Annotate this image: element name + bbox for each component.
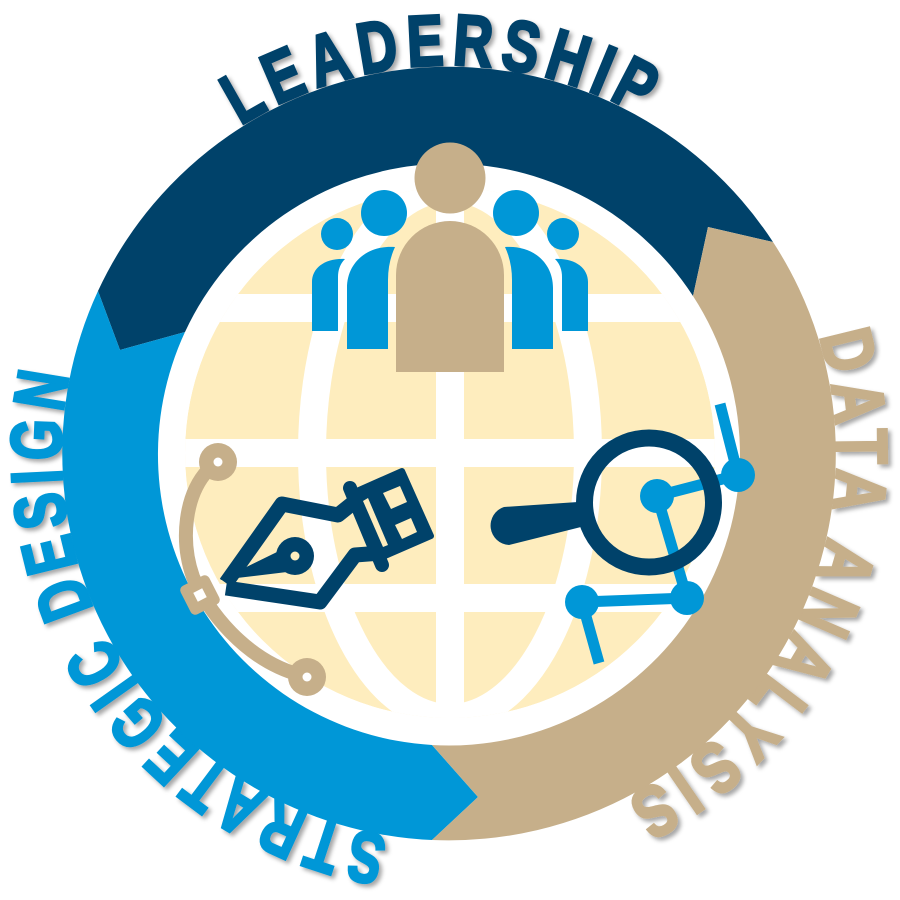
globe background [170, 180, 730, 725]
pen nib [220, 471, 431, 602]
ring segment: leadership [98, 67, 773, 350]
bezier handles [178, 443, 326, 696]
data graph [565, 404, 755, 663]
heading: Data Analysis: DATA ANALYSIS [632, 326, 894, 843]
icon: magnifier over data [491, 404, 755, 663]
ring segment: data analysis [432, 227, 836, 840]
icon: leadership people [312, 142, 588, 372]
circular arrow ring [62, 67, 836, 840]
heading: Leadership: LEADERSHIP [217, 14, 664, 126]
tan leader [396, 142, 504, 372]
ring segment: strategic design [62, 291, 478, 840]
blue team members [312, 190, 588, 349]
heading: Strategic Design: STRATEGIC DESIGN [10, 369, 391, 890]
icon: pen tool [178, 443, 431, 696]
magnifying glass [491, 438, 714, 567]
